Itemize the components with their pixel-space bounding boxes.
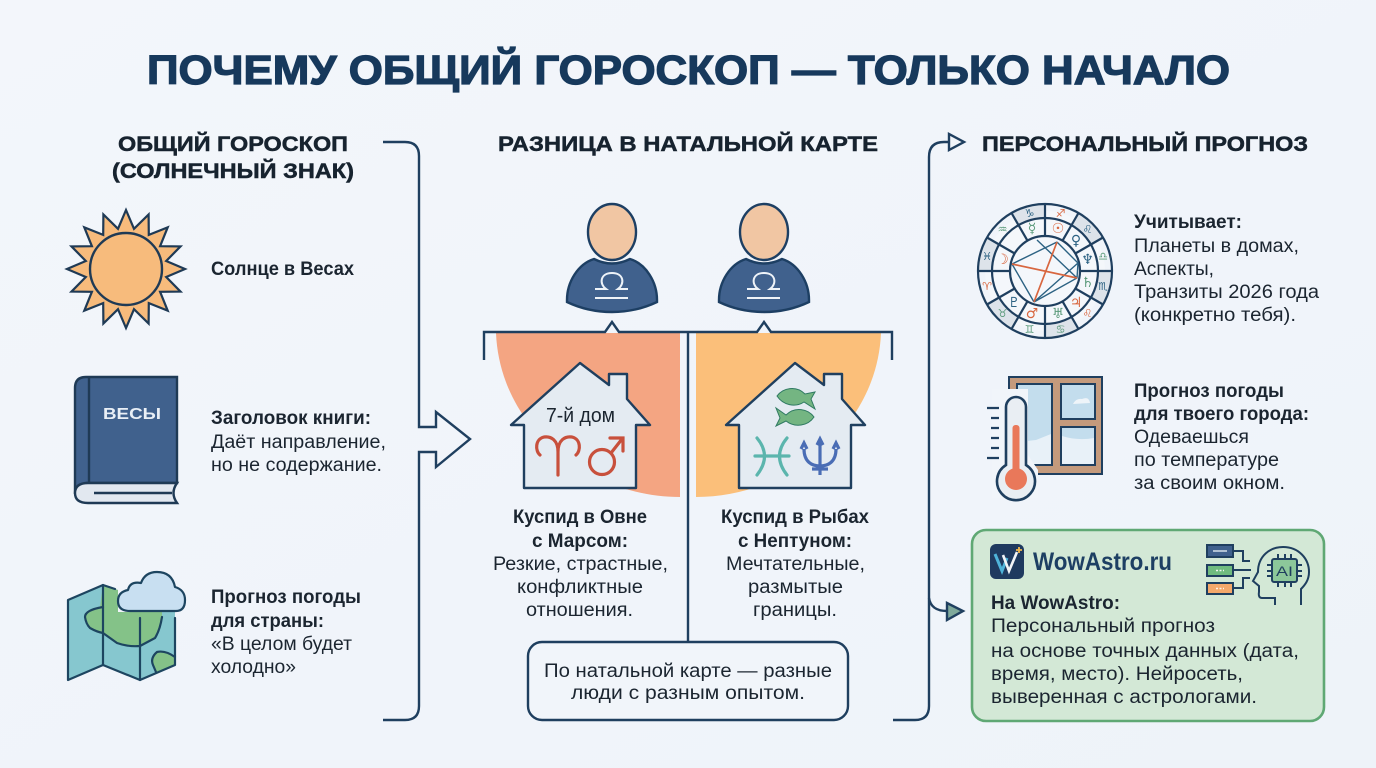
text: country weather forecast: «В целом будет [211,634,352,655]
zodiac glyphs: ♂ [1026,306,1038,322]
zodiac glyphs: ♌ [1082,223,1092,236]
text: cusp in Pisces: границы. [753,600,837,621]
text: cusp in Pisces: с Нептуном: [738,531,852,552]
zodiac glyphs: ♅ [1052,306,1064,322]
icon: Neptune [801,439,839,475]
text: cusp in Pisces [721,507,869,621]
icon: AI head: AI [1276,563,1293,579]
zodiac glyphs: ♋ [1056,323,1065,336]
text: takes into account: Планеты в домах, [1134,236,1299,257]
text: book title [211,408,386,476]
text: book title: но не содержание. [211,455,382,476]
heading: general horoscope: ОБЩИЙ ГОРОСКОП [118,132,348,156]
text: on WowAstro: на основе точных данных (дата, [991,641,1299,662]
title: ПОЧЕМУ ОБЩИЙ ГОРОСКОП — ТОЛЬКО НАЧАЛО [147,47,1230,93]
heading: natal chart difference: РАЗНИЦА В НАТАЛЬНОЙ КАРТЕ [498,132,878,156]
text: cusp in Pisces: Куспид в Рыбах [721,507,869,528]
panel: personal forecast [972,132,1324,721]
text: cusp in Aries [493,507,668,621]
text: city weather forecast: Прогноз погоды [1134,381,1284,402]
text: on WowAstro: время, место). Нейросеть, [991,664,1243,685]
zodiac glyphs: ♓ [982,250,992,263]
logo: WowAstro [990,544,1024,579]
text: city weather forecast: за своим окном. [1134,473,1285,494]
text: sun in Libra: Солнце в Весах [211,259,354,280]
person: right [719,204,809,312]
zodiac glyphs: ♑ [1025,207,1034,220]
background: yellow quarter [696,333,881,497]
text: on WowAstro [991,593,1299,708]
text: city weather forecast [1134,381,1309,494]
text: country weather forecast: холодно» [211,657,296,678]
house: left [511,363,650,488]
brand name: WowAstro.ru [1033,548,1172,576]
text: on WowAstro: Персональный прогноз [991,616,1215,637]
icon: Pisces [755,438,789,475]
text: city weather forecast: для твоего города: [1134,404,1309,425]
text: takes into account [1134,212,1319,326]
house: right [726,363,865,488]
text: takes into account: (конкретно тебя). [1134,305,1296,326]
background: orange quarter [496,333,680,497]
icon: window and thermometer [987,377,1102,500]
panel: general horoscope [67,132,386,680]
text: book title: Даёт направление, [211,432,386,453]
zodiac glyphs: ♇ [1008,295,1020,311]
zodiac glyphs: ♏ [1098,280,1108,293]
text: on WowAstro: На WowAstro: [991,593,1120,614]
text: takes into account: Транзиты 2026 года [1134,282,1319,303]
zodiac glyphs: ♒ [998,223,1008,236]
text: city weather forecast: Одеваешься [1134,427,1249,448]
icon: book: ВЕСЫ [103,406,161,423]
text: cusp in Aries: Куспид в Овне [513,507,647,528]
zodiac glyphs: ♆ [1081,252,1094,268]
text: city weather forecast: по температуре [1134,450,1279,471]
zodiac glyphs: ♄ [1081,275,1094,291]
icon: book [75,377,177,503]
text: takes into account: Учитывает: [1134,212,1242,233]
heading: general horoscope: (СОЛНЕЧНЫЙ ЗНАК) [112,159,354,183]
label: 7th house: 7-й дом [546,405,615,427]
text: cusp in Aries: с Марсом: [532,531,628,552]
zodiac glyphs: ♌ [1082,307,1092,320]
callout: conclusion [528,642,848,720]
icon: sun [67,210,185,328]
connector: bracket and divider [484,322,892,642]
zodiac glyphs: ♈ [982,280,992,293]
zodiac glyphs: ♎ [1098,250,1108,263]
arrow: bracket to personal forecast [893,134,964,720]
text: country weather forecast [211,587,361,678]
chart aspects [1012,240,1078,302]
person: left [567,204,657,312]
heading: general horoscope [112,132,354,183]
zodiac glyphs: ☽ [996,252,1009,268]
panel: natal chart difference [484,132,892,720]
text: cusp in Aries: конфликтные [517,577,643,598]
heading: personal forecast: ПЕРСОНАЛЬНЫЙ ПРОГНОЗ [982,132,1308,156]
text: country weather forecast: для страны: [211,611,324,632]
text: cusp in Aries: Резкие, страстные, [493,554,668,575]
zodiac glyphs: ☿ [1028,221,1036,237]
text: cusp in Aries: отношения. [526,600,633,621]
text: cusp in Pisces: размытые [748,577,843,598]
zodiac glyphs: ♃ [1070,295,1082,311]
zodiac glyphs: ☉ [1052,221,1064,237]
icon: natal chart wheel [978,204,1112,338]
icon: Mars [590,438,623,474]
callout: conclusion: По натальной карте — разные [544,661,832,682]
icon: Aries [537,437,579,475]
zodiac glyphs: ♐ [1056,207,1065,220]
icon: map with cloud [68,572,185,680]
zodiac glyphs: ♀ [1071,233,1081,249]
text: cusp in Pisces: Мечтательные, [726,554,865,575]
icon: fish [776,388,815,426]
text: on WowAstro: выверенная с астрологами. [991,687,1257,708]
arrow: bracket to centre [383,142,470,720]
zodiac glyphs: ♊ [1025,323,1034,336]
zodiac glyphs [982,207,1108,336]
text: book title: Заголовок книги: [211,408,371,429]
icon: AI head [1207,545,1309,605]
text: country weather forecast: Прогноз погоды [211,587,361,608]
text: takes into account: Аспекты, [1134,259,1214,280]
callout: conclusion: люди с разным опытом. [571,683,805,704]
zodiac glyphs: ♉ [998,307,1008,320]
panel: WowAstro [972,530,1324,721]
